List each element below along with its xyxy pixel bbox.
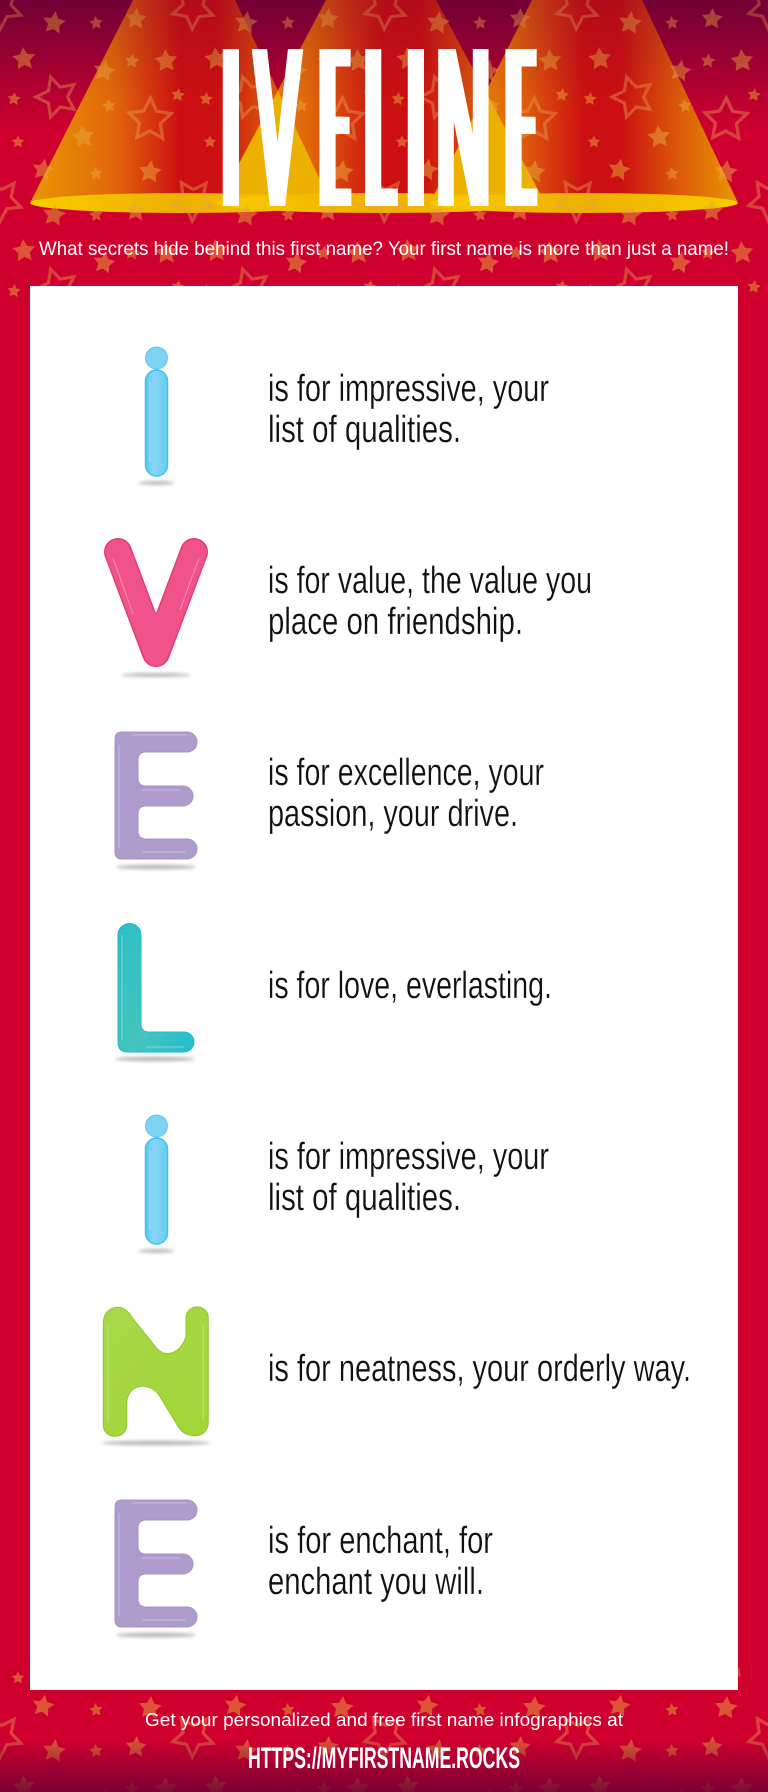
text: row 2: is for value, the value you: [268, 560, 592, 602]
row 4: letter L: [115, 924, 552, 1062]
star pattern top: [0, 0, 768, 300]
text: row 3: passion, your drive.: [268, 793, 518, 835]
title: I: [226, 1, 236, 255]
icon: letter E: [115, 732, 197, 870]
subtitle: What secrets hide behind this first name? Your first name is more than just a name!: [39, 238, 729, 260]
icon: letter L: [115, 924, 195, 1062]
star pattern bottom: [0, 1668, 768, 1792]
icon: letter i: [138, 1115, 174, 1253]
row 1: letter I: [138, 347, 549, 485]
footer text: Get your personalized and free first name infographics at: [145, 1709, 623, 1730]
text: row 2: place on friendship.: [268, 601, 523, 643]
text: row 3: is for excellence, your: [268, 752, 544, 794]
row 3: letter E: [115, 732, 544, 870]
row 2: letter V: [113, 552, 592, 677]
title: E: [509, 1, 532, 255]
row 6: letter N: [102, 1307, 691, 1446]
text: row 7: is for enchant, for: [268, 1520, 493, 1562]
spotlights: [30, 0, 738, 213]
title: [222, 1, 538, 255]
icon: letter i: [138, 347, 174, 485]
panel: white content: [30, 286, 738, 1690]
top soft shading: [0, 0, 768, 100]
title: N: [437, 1, 490, 255]
row 5: letter I: [138, 1115, 549, 1253]
text: row 1: list of qualities.: [268, 409, 461, 451]
title: E: [323, 1, 346, 255]
icon: letter E: [115, 1500, 197, 1638]
text: row 1: is for impressive, your: [268, 368, 549, 410]
footer url: HTTPS://MYFIRSTNAME.ROCKS: [248, 1742, 520, 1775]
text: row 7: enchant you will.: [268, 1561, 484, 1603]
icon: letter V: [113, 552, 199, 677]
top background shading: [0, 0, 768, 135]
text: row 5: list of qualities.: [268, 1177, 461, 1219]
text: row 4: is for love, everlasting.: [268, 965, 552, 1007]
title: V: [256, 1, 299, 255]
bottom shading: [0, 1738, 768, 1792]
title: I: [411, 1, 421, 255]
icon: letter N: [102, 1307, 210, 1446]
title: L: [367, 1, 394, 255]
text: row 5: is for impressive, your: [268, 1136, 549, 1178]
row 7: letter E: [115, 1500, 493, 1638]
